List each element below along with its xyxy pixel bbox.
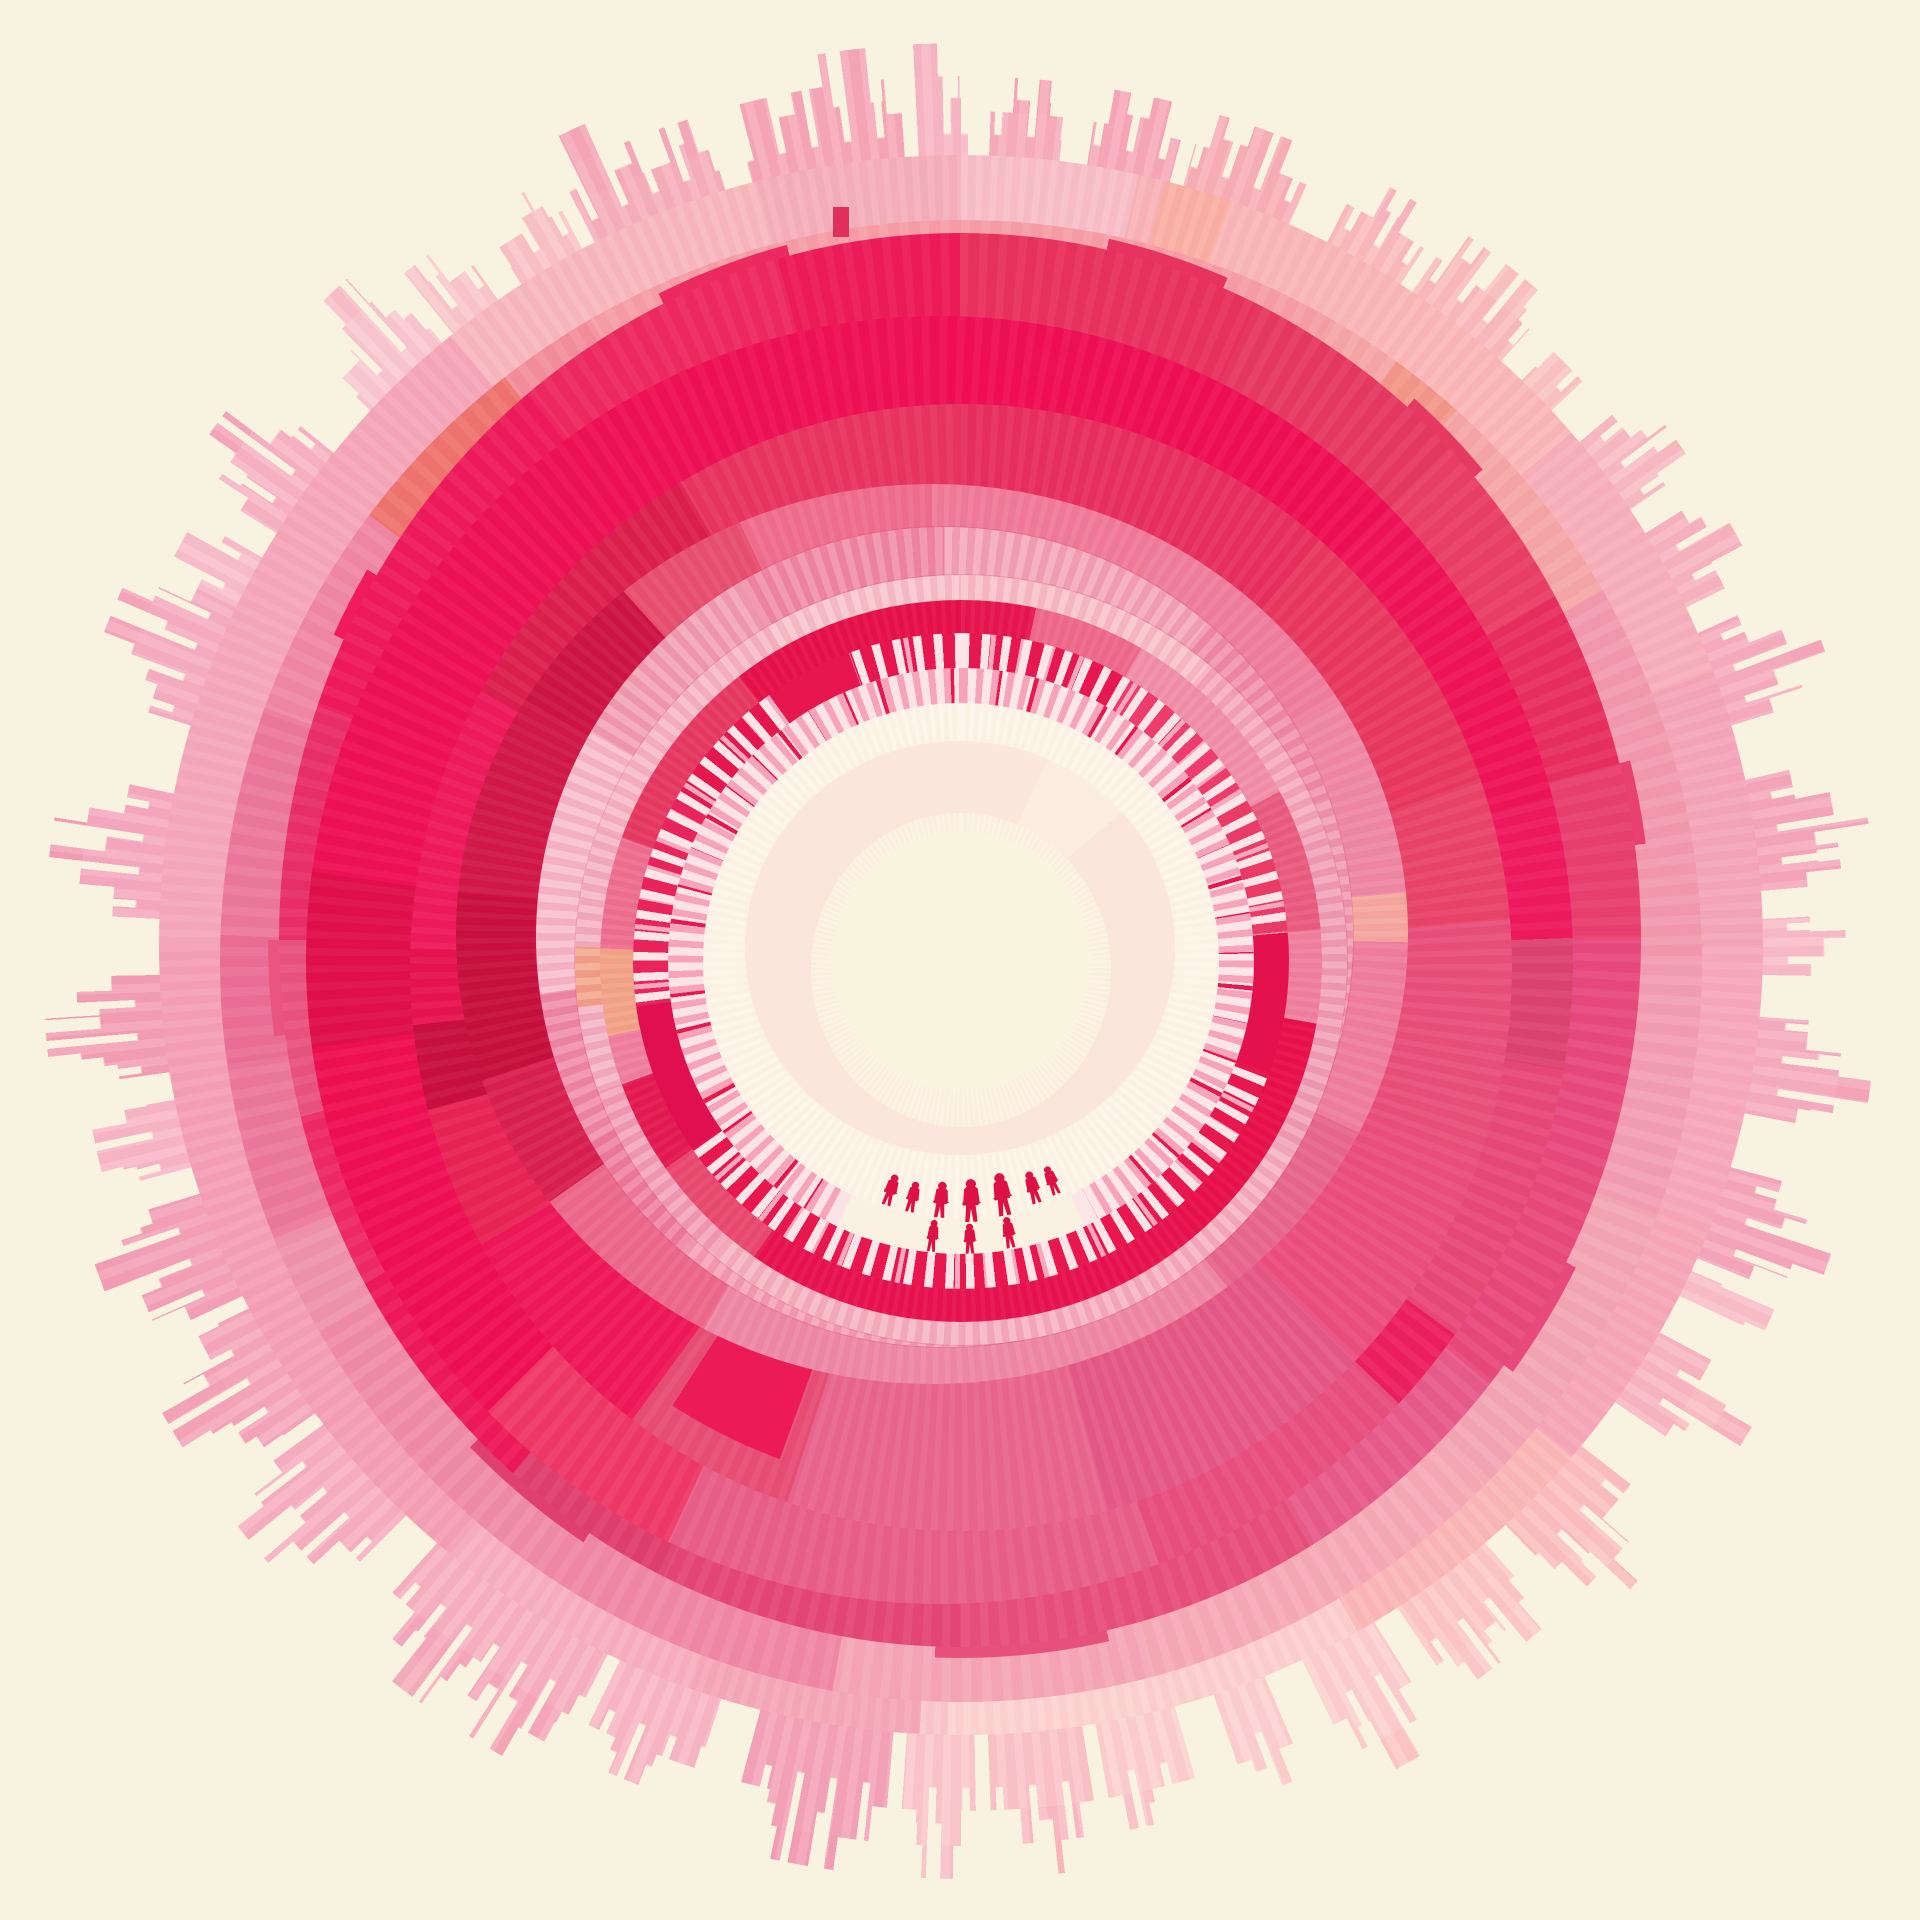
small block above crimson ring (833, 207, 849, 237)
figure (903, 1180, 923, 1213)
figure (1021, 1169, 1045, 1205)
hot block lower left (431, 431, 1491, 1491)
crimson ring 2: hot (306, 316, 1573, 1604)
figure (989, 1171, 1015, 1217)
crimson ring 1 (279, 233, 1641, 1647)
rose band (220, 220, 1702, 1702)
white striped ring: base (668, 668, 1254, 1254)
figure (963, 1223, 977, 1254)
figure (999, 1216, 1018, 1249)
pale pink inner ring (745, 741, 1175, 1155)
red and white striped ring: white stripes (633, 633, 1289, 1289)
crimson ring 4 (456, 484, 1408, 1384)
central glow (831, 831, 1091, 1091)
figure (932, 1181, 951, 1218)
pale segment ring inner (575, 575, 1347, 1345)
figure (925, 1219, 941, 1252)
crimson ring 3 (410, 404, 1512, 1531)
white striped ring: stripes (668, 668, 1254, 1254)
crimson ring outer steps (268, 222, 1652, 1658)
red ring (600, 600, 1322, 1322)
cream ring (703, 703, 1219, 1219)
red and white striped ring: base (633, 633, 1289, 1289)
inner cream spokes ring (811, 813, 1111, 1127)
outer spikes: broad clusters (111, 111, 1811, 1811)
figure (1040, 1164, 1063, 1197)
pale segment ring outer (536, 527, 1353, 1347)
figure (961, 1179, 982, 1222)
pale outer band (159, 155, 1763, 1735)
figure (880, 1173, 903, 1207)
